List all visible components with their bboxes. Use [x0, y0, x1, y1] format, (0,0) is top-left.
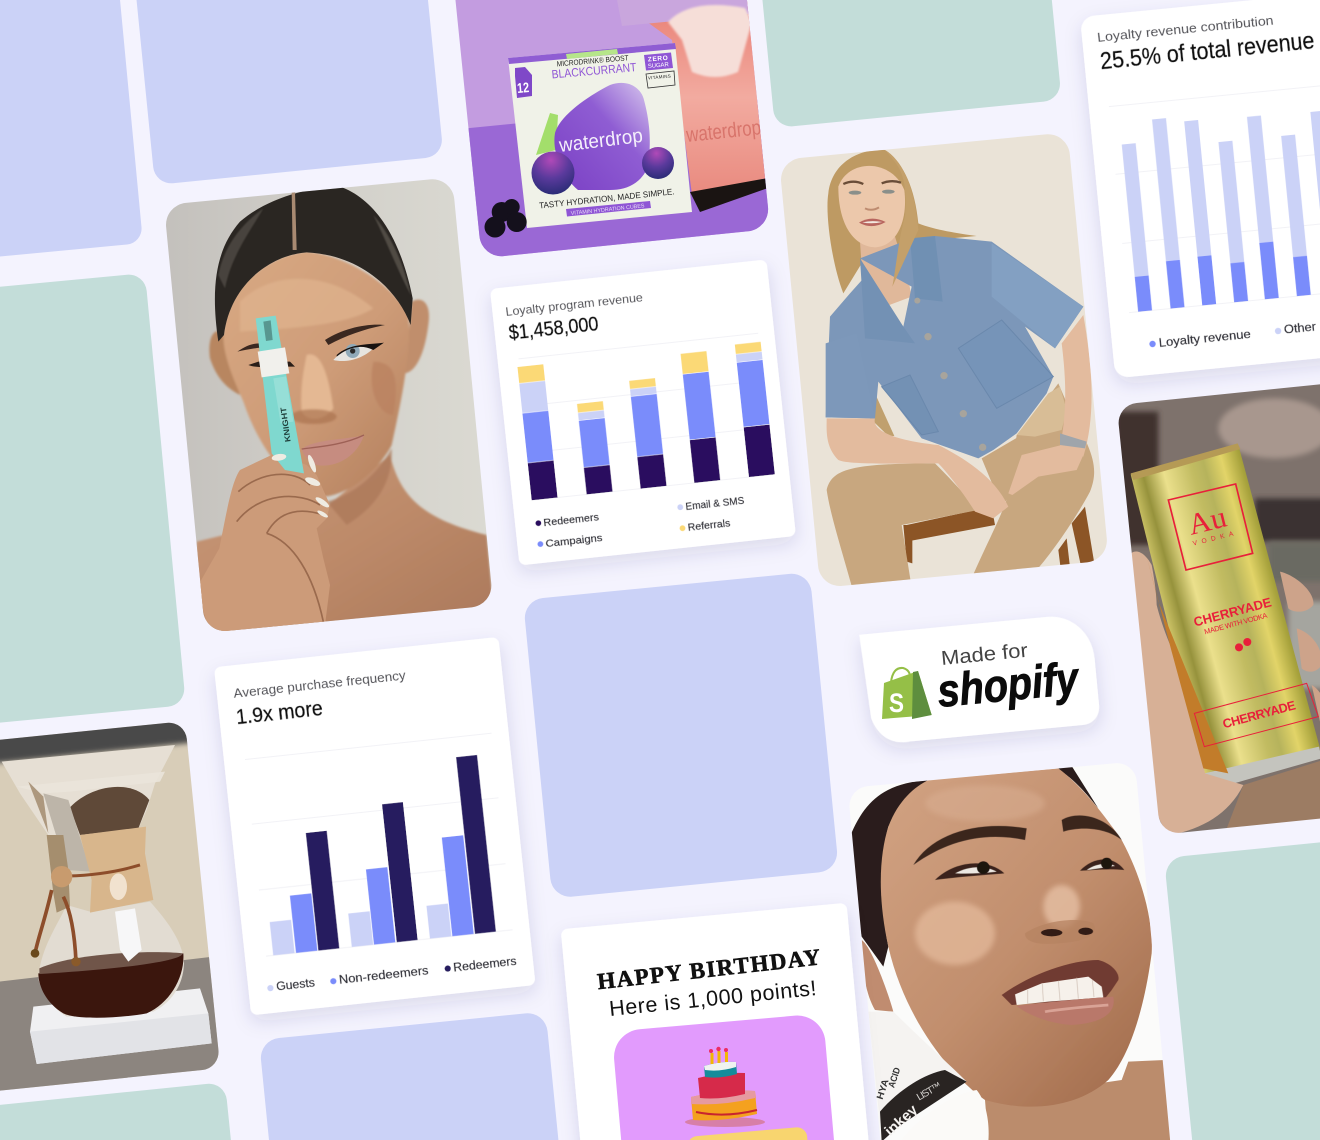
icon: blackcurrants — [484, 199, 527, 238]
icon: filter paper — [2, 745, 175, 872]
icon: Inkey List bottle: HYA — [875, 1078, 891, 1101]
chart panel: loyalty revenue contribution — [1080, 0, 1320, 378]
nose — [1026, 920, 1080, 942]
can — [1131, 443, 1320, 785]
panel: teal tile left — [0, 273, 186, 733]
blurred background — [1115, 398, 1320, 688]
can label: CHERRYADE — [1221, 698, 1297, 731]
eyes — [935, 863, 1004, 880]
legend: Email & SMS — [685, 495, 745, 513]
icon: product box: MICRODRINK® BOOST — [556, 53, 629, 68]
pink image panel — [614, 1016, 834, 1140]
hair behind — [827, 150, 977, 293]
icon: Inkey List bottle — [868, 1012, 989, 1140]
value: $1,458,000 — [508, 313, 600, 345]
icon: product box — [508, 43, 692, 228]
legend — [267, 956, 517, 995]
heading: happy birthday: HAPPY BIRTHDAY — [596, 944, 822, 994]
icon: product box: VITAMINS — [648, 74, 671, 80]
panel: teal tile bottom-left — [0, 1082, 245, 1140]
lips — [302, 435, 364, 466]
watch — [1060, 433, 1087, 448]
icon: product box: SUGAR — [648, 62, 670, 70]
can label: MADE WITH VODKA — [1203, 611, 1268, 636]
can label — [1168, 484, 1318, 747]
icon: product box: ZERO — [648, 55, 668, 63]
legend: Other — [1283, 321, 1317, 337]
legend: Campaigns — [545, 532, 603, 550]
legend — [1149, 321, 1317, 351]
icon: shopify bag: S — [889, 688, 904, 718]
mouth — [1002, 960, 1119, 1005]
icon: mint serum tube — [256, 316, 304, 473]
photo: smiling woman with Inkey List bottle — [852, 767, 1170, 1140]
icon: shopify bag — [882, 668, 932, 719]
icon: product box: 12 — [516, 79, 530, 96]
icon: brewed coffee — [38, 953, 183, 1018]
chart panel: loyalty program revenue — [490, 259, 796, 565]
heading: Loyalty revenue contribution — [1097, 12, 1274, 45]
chair — [868, 393, 1094, 569]
can label: Au — [1185, 500, 1230, 542]
stacked bar chart — [1120, 103, 1320, 312]
icon: product box: waterdrop — [557, 125, 644, 157]
panel: lavender tile top — [133, 0, 444, 185]
legend: Redeemers — [543, 511, 600, 529]
text: shopify wordmark: shopify — [935, 651, 1082, 717]
birthday email card — [561, 903, 874, 1140]
can label: CHERRYADE — [1192, 594, 1273, 630]
can label: VODKA — [1192, 531, 1235, 548]
shopify badge — [859, 613, 1101, 746]
icon: Inkey List bottle: inkey — [882, 1102, 922, 1140]
panel: teal tile top — [755, 0, 1062, 128]
eyebrows — [913, 826, 1027, 865]
icon: mint serum tube: KNIGHT — [279, 407, 293, 443]
panel: teal tile bottom-right — [1164, 829, 1320, 1140]
icon: glass of pink drink — [617, 0, 768, 212]
photo: woman in denim shirt on chair — [781, 134, 1107, 586]
neck — [860, 237, 912, 307]
heading: Loyalty program revenue — [505, 290, 644, 319]
chart panel: average purchase frequency — [214, 637, 536, 1015]
icon: birthday cake — [685, 1047, 765, 1127]
panel: lavender tile centre — [523, 572, 839, 899]
khaki trousers — [827, 383, 1094, 592]
photo: Au vodka cherryade can in hand — [1110, 380, 1320, 850]
panel: lavender tile bottom — [259, 1011, 565, 1140]
icon: wooden collar — [80, 827, 153, 913]
legend: Loyalty revenue — [1158, 329, 1251, 350]
blue suede shirt — [826, 236, 1083, 458]
stacked bar chart — [517, 341, 775, 500]
subheading: points: Here is 1,000 points! — [608, 976, 817, 1021]
value: 1.9x more — [235, 697, 324, 729]
button — [687, 1127, 809, 1140]
icon: glass of pink drink: waterdrop — [684, 116, 762, 147]
hand — [198, 453, 330, 636]
fingernails — [271, 453, 330, 519]
legend: Redeemers — [453, 956, 517, 975]
arms and hands — [827, 315, 1092, 518]
icon: product box: TASTY HYDRATION, MADE SIMPLE. — [539, 186, 675, 210]
right eye and brow — [325, 325, 385, 361]
icon: scale base — [30, 988, 212, 1064]
icon: product box: BLACKCURRANT — [551, 60, 638, 81]
photo: woman holding mint serum pen — [166, 179, 492, 631]
heading: Average purchase frequency — [233, 667, 407, 701]
icon: Inkey List bottle: ACID — [886, 1066, 902, 1089]
photo: Chemex coffee maker — [0, 722, 219, 1091]
grouped bar chart — [254, 755, 496, 955]
photo: waterdrop product shot — [456, 0, 768, 256]
icon: product box: VITAMIN HYDRATION CUBES — [571, 203, 645, 217]
legend — [535, 495, 747, 551]
legend: Guests — [276, 977, 316, 994]
icon: Inkey List bottle: LIST™ — [915, 1080, 944, 1103]
legend: Referrals — [687, 518, 731, 534]
text: made for: Made for — [940, 640, 1029, 670]
hand and fingers — [1227, 572, 1320, 828]
panel: lavender tile top-left — [0, 0, 143, 271]
icon: glass carafe — [38, 902, 184, 1017]
face — [838, 166, 905, 247]
legend: Non-redeemers — [338, 965, 429, 987]
